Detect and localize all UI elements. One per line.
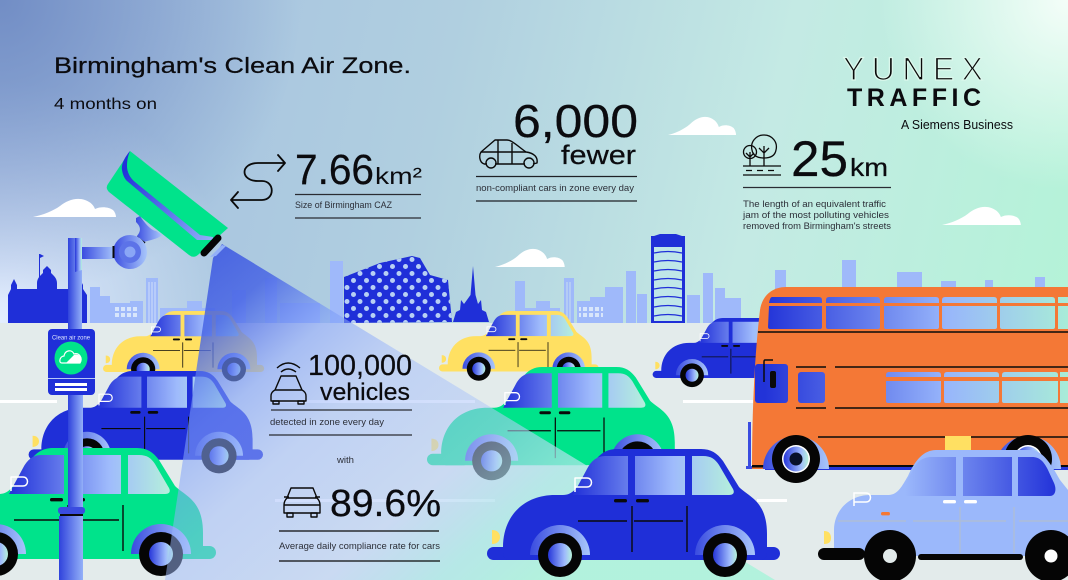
light blue taxi [818,436,1068,580]
icon: S-shaped route arrow [231,155,285,208]
stat: compliance rate: 89.6% [330,483,441,525]
icon: car front [284,488,320,517]
sign: clean air zone: Clean air zone [52,334,91,342]
stat: fewer cars [476,95,638,201]
lamp post and arm [58,238,115,580]
icon: trees and road [743,135,781,175]
stat: traffic jam length: The length of an equivalent traffic [743,199,886,210]
stat: compliance rate [279,483,441,561]
green car centre [427,367,686,487]
stat: vehicles detected: detected in zone every day [270,417,384,428]
icon: car outline [480,140,537,168]
stat: CAZ size: Size of Birmingham CAZ [295,200,392,211]
camera view cone [165,244,775,580]
logo: Yunex Traffic: TRAFFIC [847,84,981,112]
logo: Yunex Traffic: YUNEX [843,51,983,87]
stat: CAZ size: km² [375,163,422,189]
title: Birmingham's Clean Air Zone. [54,53,411,78]
green car left [0,448,216,580]
stat: vehicles detected: 100,000 [308,350,412,382]
stat: CAZ size [231,146,422,218]
large blue car [487,449,780,580]
yellow car right [439,311,599,385]
skyline: Selfridges building [344,256,452,323]
road [0,323,1068,580]
stat: traffic jam length: 25 [791,131,848,187]
stat: vehicles detected: vehicles [320,379,410,406]
blue car left [29,371,263,480]
road markings [0,400,787,502]
logo: Yunex Traffic: A Siemens Business [901,118,1013,132]
connector text: with: with [336,455,354,466]
yellow car left [103,311,264,386]
clouds [33,117,1021,267]
double-decker bus [746,287,1068,483]
skyline: Council House landmark [8,254,87,323]
skyline: rotunda tower [651,234,685,323]
stat: traffic jam length: removed from Birmingham's streets [743,221,891,232]
stat: traffic jam length: km [850,154,888,182]
stat: traffic jam length: jam of the most polluting vehicles [742,210,889,221]
logo: Yunex Traffic [843,51,1013,132]
stat: traffic jam length [742,131,891,232]
stat: CAZ size: 7.66 [295,146,374,194]
skyline: light buildings [90,260,1045,323]
stat: fewer cars: 6,000 [513,95,638,147]
CCTV camera [107,151,228,269]
sign: clean air zone [48,329,95,395]
stat: compliance rate: Average daily compliance rate for cars [279,541,440,552]
icon: connected car [271,363,306,404]
skyline: cathedral spire [453,266,489,322]
subtitle: 4 months on [54,96,157,113]
stat: fewer cars: fewer [561,140,636,170]
stat: vehicles detected [269,350,412,435]
small blue car [653,318,811,391]
stat: fewer cars: non-compliant cars in zone every day [476,183,634,194]
